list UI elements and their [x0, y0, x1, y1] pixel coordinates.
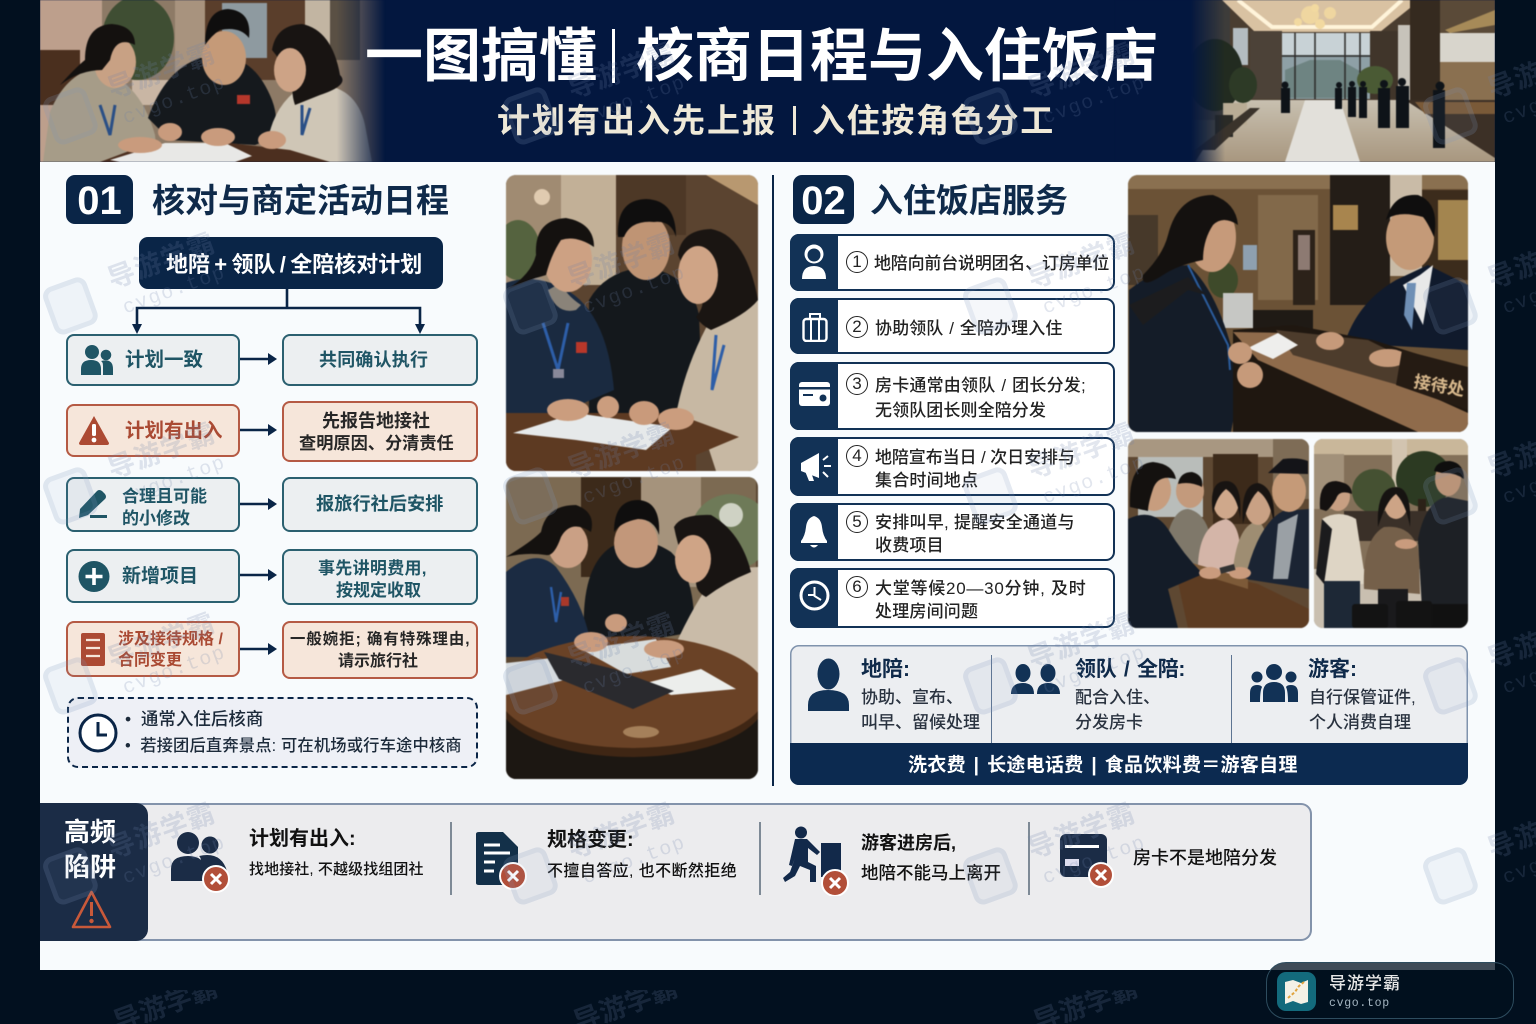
trap divider — [450, 822, 452, 895]
service step 1: 1 — [852, 252, 862, 271]
watermark layer: cvgo.top — [580, 72, 689, 130]
watermark layer: 导游学霸 — [1024, 798, 1139, 864]
role: local guide — [808, 658, 980, 732]
flow row 5 right: 一般婉拒; 确有特殊理由, — [290, 631, 471, 648]
watermark layer: cvgo.top — [1040, 642, 1149, 700]
label: 计划一致 — [125, 349, 203, 371]
service step 3 — [790, 362, 1115, 430]
watermark layer: cvgo.top — [580, 642, 689, 700]
watermark layer: 导游学霸 — [104, 608, 219, 674]
icon: clock — [78, 714, 118, 752]
trap 3: 游客进房后, — [861, 833, 956, 853]
label: 合理且可能 — [122, 487, 207, 506]
watermark layer: cvgo.top — [580, 452, 689, 510]
trap 1: 找地接社, 不越级找组团社 — [249, 861, 424, 878]
service step 5: 收费项目 — [875, 536, 944, 555]
section 02 number badge — [793, 175, 854, 224]
watermark layer: 导游学霸 — [564, 608, 679, 674]
icon: document with cross — [476, 832, 527, 890]
photo: guide handing card to group — [1127, 438, 1310, 629]
service step 3: 无领队团长则全陪分发 — [875, 401, 1046, 420]
service step 6: 处理房间问题 — [875, 602, 978, 621]
section 01 number badge — [66, 175, 133, 224]
flow row 2 right: 先报告地接社 — [322, 411, 430, 431]
service step 2: 协助领队 / 全陪办理入住 — [875, 319, 1062, 338]
icon: two people — [1011, 664, 1060, 694]
service step 5: 安排叫早, 提醒安全通道与 — [875, 513, 1075, 532]
role divider — [991, 655, 992, 743]
title: 一图搞懂 — [365, 24, 597, 89]
flow row 5 left: 合同变更 — [118, 652, 182, 669]
icon: room card — [799, 382, 830, 406]
photo: guide at reception desk — [1127, 174, 1469, 433]
watermark layer: 导游学霸 — [104, 418, 219, 484]
traps tab: 高频 — [64, 817, 116, 847]
trap 2 — [476, 828, 737, 890]
icon: megaphone — [801, 453, 831, 481]
service step 6 — [790, 568, 1115, 628]
service step 5: 5 — [852, 512, 862, 531]
flow row 3 right — [282, 477, 478, 532]
divider between sections — [772, 175, 774, 786]
watermark layer: 导游学霸 — [564, 228, 679, 294]
photo: group in lobby with luggage — [1313, 438, 1469, 629]
subtitle divider — [793, 106, 796, 135]
icon: warning outline — [72, 890, 112, 928]
trap 3: 地陪不能马上离开 — [861, 863, 1001, 883]
flow row 1 left — [66, 334, 240, 386]
role: tour leader: 分发房卡 — [1075, 713, 1143, 732]
trap divider — [1028, 822, 1030, 895]
watermark layer: cvgo.top — [1040, 452, 1149, 510]
role: guests — [1250, 658, 1416, 732]
flow row 3 right: 报旅行社后安排 — [316, 494, 443, 514]
arrow — [240, 353, 277, 365]
flow row 2 left — [66, 404, 240, 457]
traps tab: 陷阱 — [64, 852, 116, 882]
brand url: cvgo.top — [1329, 997, 1390, 1010]
watermark layer: 导游学霸 — [564, 418, 679, 484]
watermark layer: 导游学霸 — [1024, 38, 1139, 104]
watermark layer: cvgo.top — [120, 642, 229, 700]
traps tab — [40, 803, 148, 941]
service step 1 — [790, 234, 1115, 291]
watermark layer: 导游学霸 — [1024, 608, 1139, 674]
flow row 3 left: 的小修改 — [122, 509, 190, 528]
role: tour leader: 配合入住、 — [1075, 688, 1160, 707]
role: guests: 游客: — [1308, 658, 1357, 681]
watermark layer: 导游学霸 — [104, 798, 219, 864]
timing note: • 若接团后直奔景点: 可在机场或行车途中核商 — [125, 737, 462, 755]
watermark layer: 导游学霸 — [1024, 228, 1139, 294]
trap 1: 计划有出入: — [249, 828, 356, 850]
role: guests: 自行保管证件, — [1309, 688, 1416, 707]
watermark layer: 导游学霸 — [564, 798, 679, 864]
timing note — [67, 697, 478, 768]
flow row 1 right: 共同确认执行 — [319, 350, 428, 370]
label: 新增项目 — [122, 566, 198, 587]
trap 3 — [783, 826, 1001, 896]
watermark layer: cvgo.top — [120, 832, 229, 890]
role divider — [1231, 655, 1232, 743]
service step 3: 房卡通常由领队 / 团长分发; — [875, 376, 1086, 395]
note lines: • 通常入住后核商 — [125, 709, 263, 729]
flow row 1 right — [282, 334, 478, 386]
watermark layer: cvgo.top — [1040, 72, 1149, 130]
service step 4: 地陪宣布当日 / 次日安排与 — [875, 448, 1075, 467]
watermark layer: 导游学霸 — [104, 228, 219, 294]
subtitle part two: 入住按角色分工 — [812, 102, 1055, 139]
trap 2: 规格变更: — [547, 829, 634, 851]
role: tour leader — [1011, 658, 1185, 732]
role: local guide: 叫早、留候处理 — [861, 713, 980, 732]
flow row 5 right — [282, 621, 478, 679]
service step 4: 4 — [852, 446, 862, 465]
flow row 4 right — [282, 549, 478, 605]
section 02 number badge: 02 — [801, 179, 846, 223]
desk sign — [1396, 350, 1468, 410]
label: 计划有出入 — [125, 420, 223, 442]
service step 3: 3 — [852, 374, 862, 393]
watermark layer: cvgo.top — [120, 262, 229, 320]
flow row 2 right: 查明原因、分清责任 — [299, 433, 454, 453]
service step 2: 2 — [852, 317, 862, 336]
icon: document — [81, 633, 105, 666]
service step 6: 大堂等候20—30分钟, 及时 — [875, 579, 1087, 598]
icon: leaving figure with cross — [783, 826, 849, 896]
title part two: 核商日程与入住饭店 — [636, 24, 1158, 89]
role: local guide: 地陪: — [861, 658, 910, 681]
photo: three people reading plan at table — [505, 174, 759, 472]
flow root box — [139, 237, 443, 289]
icon: plus circle — [78, 561, 110, 592]
icon: map logo — [1277, 972, 1316, 1011]
icon: receptionist — [802, 244, 826, 279]
role: guests: 个人消费自理 — [1309, 713, 1411, 732]
watermark layer: 导游学霸 — [104, 38, 219, 104]
self-pay bar: 洗衣费 | 长途电话费 | 食品饮料费＝游客自理 — [908, 755, 1298, 776]
service step 5 — [790, 503, 1115, 561]
watermark layer: cvgo.top — [1040, 832, 1149, 890]
trap divider — [759, 822, 760, 895]
flow row 5 left — [66, 621, 240, 677]
icon: two people — [81, 345, 113, 375]
watermark layer: cvgo.top — [580, 832, 689, 890]
photo: three guides reviewing plan — [40, 0, 382, 162]
section 02 heading: 入住饭店服务 — [870, 182, 1068, 219]
service step 4 — [790, 437, 1115, 496]
service step 6: 6 — [852, 577, 862, 596]
watermark layer: cvgo.top — [1040, 262, 1149, 320]
flow root box: 地陪 + 领队 / 全陪核对计划 — [166, 252, 422, 277]
self-pay bar — [790, 743, 1468, 785]
brand name: 导游学霸 — [1329, 974, 1401, 993]
roles panel — [790, 645, 1468, 785]
flow row 4 right: 按规定收取 — [336, 581, 421, 600]
flow row 4 left — [66, 549, 240, 603]
flow row 2 right — [282, 401, 478, 462]
icon: three people — [1250, 664, 1298, 702]
flow branch connector — [132, 289, 425, 334]
service step 4: 集合时间地点 — [875, 471, 978, 490]
desk sign: 接待处 — [1412, 372, 1466, 400]
flow row 4 right: 事先讲明费用, — [318, 559, 427, 578]
service step 2 — [790, 298, 1115, 354]
header banner — [40, 0, 1495, 162]
icon: people with cross — [171, 832, 230, 893]
watermark layer: cvgo.top — [120, 72, 229, 130]
trap 4 — [1060, 834, 1277, 888]
trap 2: 不擅自答应, 也不断然拒绝 — [547, 863, 737, 880]
photo: hotel lobby — [1195, 0, 1495, 162]
subtitle: 计划有出入先上报 — [497, 102, 777, 139]
label: 涉及接待规格 / — [118, 631, 223, 648]
icon: suitcase — [802, 313, 828, 342]
role: local guide: 协助、宣布、 — [861, 688, 963, 707]
arrow — [240, 498, 277, 510]
arrow — [240, 643, 277, 655]
watermark layer: 导游学霸 — [564, 38, 679, 104]
role: tour leader: 领队 / 全陪: — [1075, 658, 1185, 681]
icon: bell — [801, 516, 827, 548]
watermark layer: cvgo.top — [120, 452, 229, 510]
traps panel — [40, 803, 1312, 941]
flow row 3 left — [66, 477, 240, 532]
arrow — [240, 569, 277, 581]
icon: person — [808, 658, 849, 711]
section 01 heading: 核对与商定活动日程 — [152, 182, 449, 219]
trap 4: 房卡不是地陪分发 — [1133, 848, 1277, 868]
icon: clock — [800, 580, 830, 610]
icon: room card with cross — [1060, 834, 1114, 888]
section 01 number badge: 01 — [77, 179, 122, 223]
icon: warning triangle — [79, 416, 109, 445]
brand badge — [1266, 962, 1514, 1019]
title divider — [612, 29, 615, 83]
content panel background — [40, 160, 1495, 970]
flow row 5 right: 请示旅行社 — [338, 653, 418, 670]
watermark layer: cvgo.top — [580, 262, 689, 320]
arrow — [240, 424, 277, 436]
trap 1 — [171, 828, 424, 893]
service step 1: 地陪向前台说明团名、订房单位 — [874, 254, 1109, 273]
icon: pencil — [79, 490, 107, 518]
photo: three people with laptop at round table — [505, 476, 759, 780]
watermark layer: 导游学霸 — [1024, 418, 1139, 484]
